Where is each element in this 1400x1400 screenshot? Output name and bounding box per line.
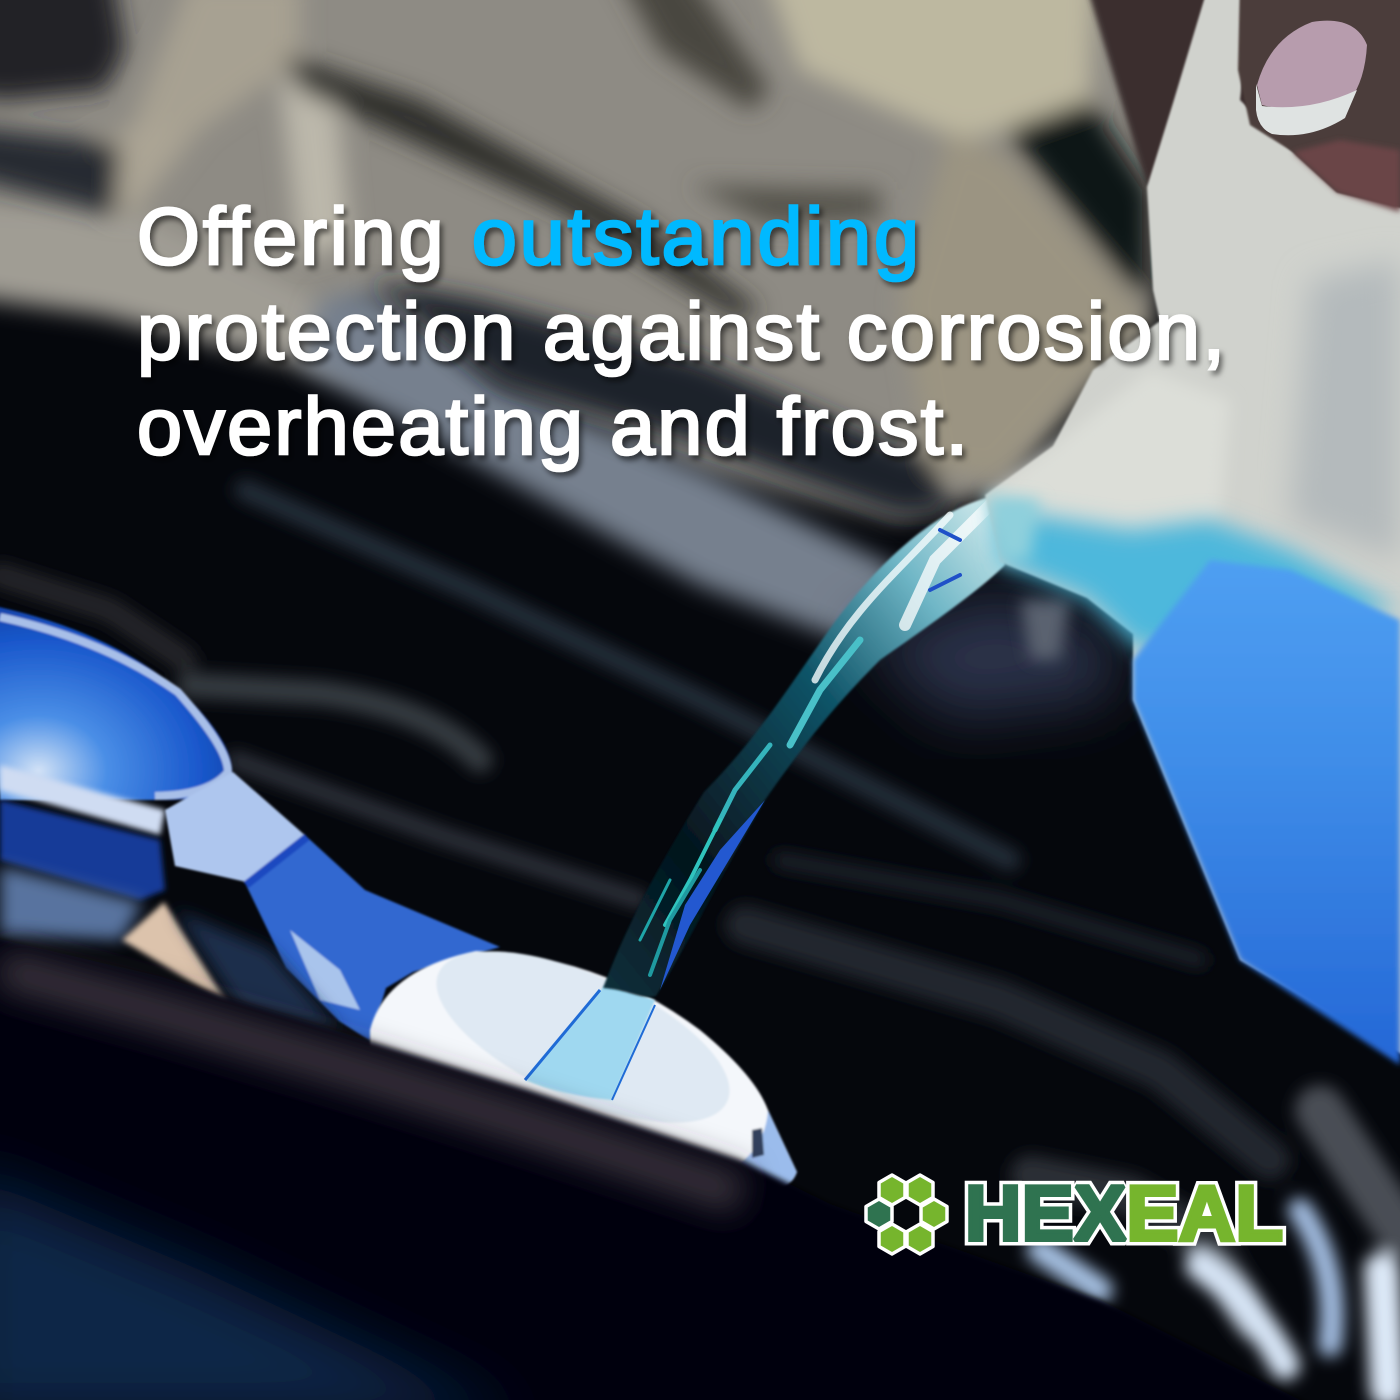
headline: Offering outstanding (137, 192, 919, 282)
headline: protection against corrosion, (137, 287, 1225, 377)
white filler neck (370, 916, 797, 1189)
blue washer reservoir and arm (0, 605, 500, 1041)
coolant stream (603, 495, 1005, 997)
engine cover, upper beige area (0, 0, 1170, 520)
logo: Hexeal (866, 1169, 1283, 1257)
headline (137, 192, 1225, 472)
wordmark: HEXEAL (965, 1169, 1283, 1257)
beige highlights and dark recesses (0, 0, 1150, 515)
wordmark: HEXEAL (965, 1169, 1283, 1257)
dark foreground hose (0, 930, 1340, 1400)
headline: overheating and frost. (137, 382, 968, 472)
icon: hexagon cluster (866, 1175, 947, 1254)
coolant bottle and hand (985, 0, 1400, 1065)
gray-blue diagonal band (300, 290, 900, 650)
background hoses (0, 490, 1400, 1390)
